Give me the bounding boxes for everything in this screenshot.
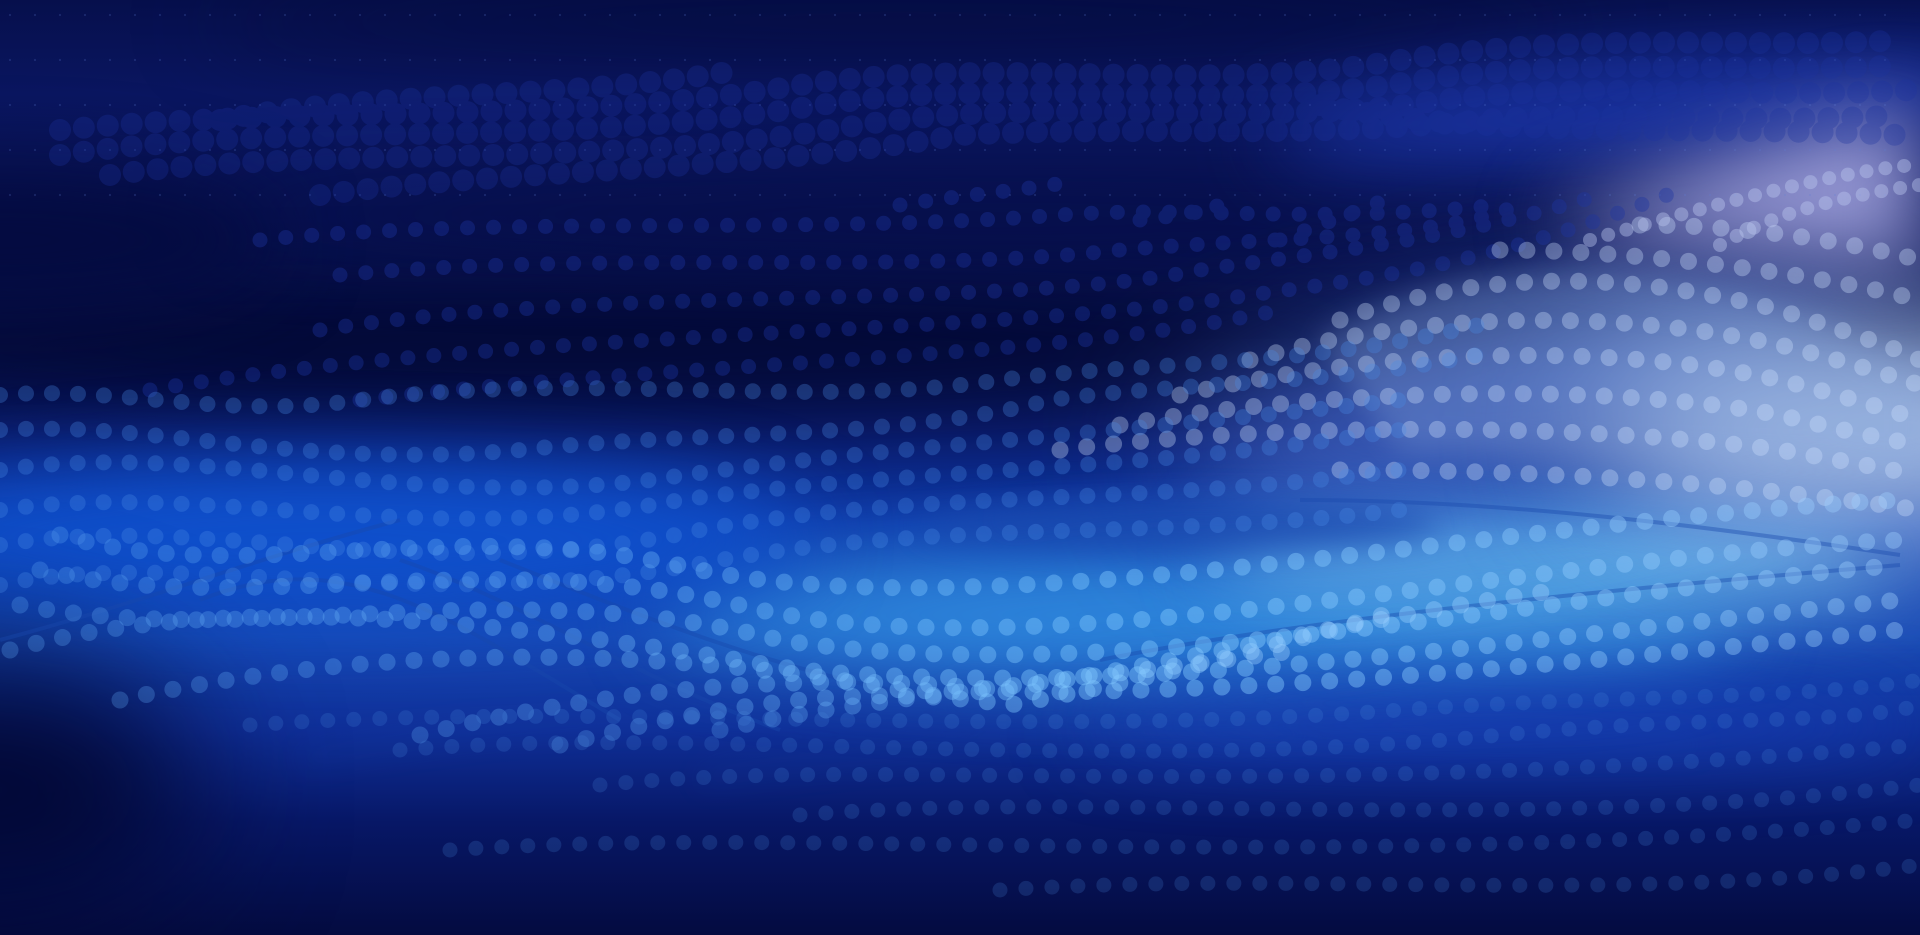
left upper dark corner — [0, 170, 280, 310]
dense dot clusters along top — [60, 40, 1910, 195]
bottom-left dark corner — [0, 660, 200, 920]
left bright blue glow — [0, 465, 810, 615]
bottom right blue lift — [1080, 703, 1920, 747]
right pale glow — [1590, 330, 1920, 530]
mid ribbon dots, rising rows — [0, 320, 1500, 585]
dark band across upper middle — [0, 300, 1380, 400]
centre cyan glow — [660, 555, 1740, 675]
right blue lift — [1162, 247, 1898, 543]
lower bright dots field — [10, 500, 1900, 745]
top-right pale streak — [1540, 110, 1920, 265]
dark band in upper centre — [200, 185, 1800, 245]
top-right blue glow — [1268, 44, 1920, 176]
pale wave hill — [1320, 269, 1920, 470]
thin wave strands — [0, 500, 1900, 730]
top-right pale dot ribbons — [1590, 165, 1920, 245]
faint dots upper rows — [150, 180, 1680, 400]
tiny dot grid at top — [10, 15, 1910, 195]
lower dim dots field — [250, 680, 1920, 890]
fine streak lines — [300, 494, 1900, 780]
mid dark lens — [920, 501, 1440, 549]
top dark streak — [200, 2, 1600, 42]
right cyan glow — [1220, 500, 1900, 620]
main wave dots, bright right — [1060, 225, 1920, 510]
